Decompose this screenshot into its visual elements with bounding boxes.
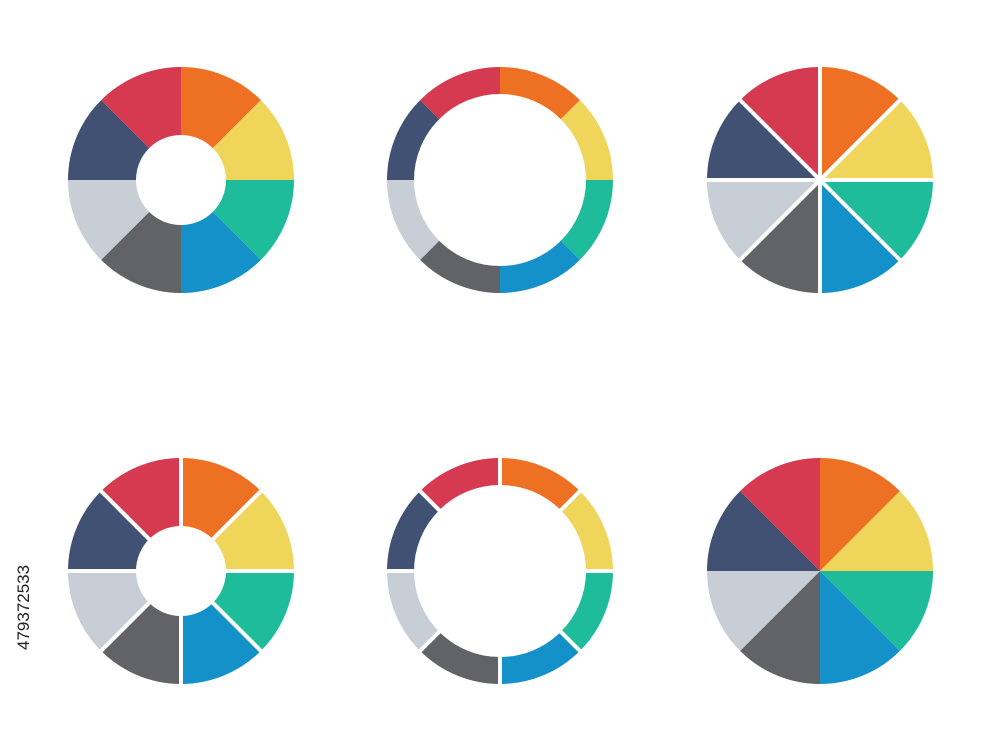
chart: thin ring, no gaps: [387, 67, 613, 293]
chart: thick donut with gaps: [61, 451, 301, 691]
chart: thick donut, no gaps: [68, 67, 294, 293]
side stock id text: 479372533: [14, 565, 33, 650]
chart: pie with gaps: [700, 60, 940, 300]
chart: thin ring with gaps: [380, 451, 620, 691]
chart: full pie, no gaps: [707, 458, 933, 684]
